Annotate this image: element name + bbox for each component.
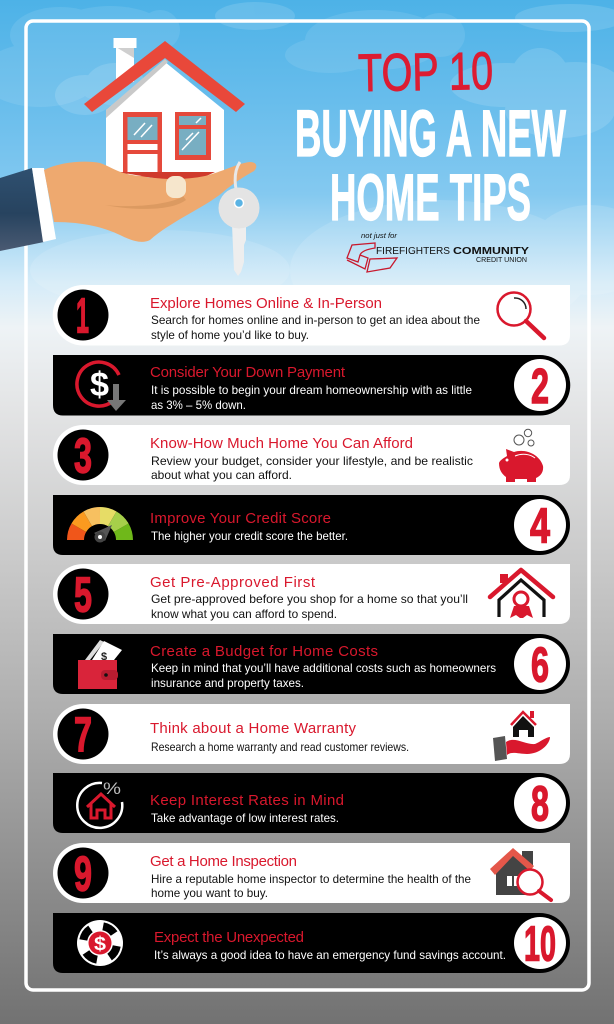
heading: Know-How Much Home You Can Afford [150, 435, 413, 452]
thumbnail [166, 176, 186, 198]
tip 6 panel [53, 634, 570, 694]
tip 3 panel [53, 425, 570, 485]
window [175, 112, 211, 160]
body: Get pre-approved before you shop for a home so that you’ll [151, 592, 468, 606]
tip 4 panel [53, 495, 570, 555]
thumb [105, 178, 186, 209]
number badge 2: 2 [531, 360, 549, 414]
body: Keep in mind that you’ll have additional costs such as homeowners [151, 661, 496, 675]
logo community: COMMUNITY [453, 245, 529, 257]
body [151, 454, 473, 482]
cuff [32, 168, 56, 242]
logo tagline: not just for [361, 231, 398, 240]
icon: credit gauge [76, 516, 124, 542]
heading: Improve Your Credit Score [150, 510, 331, 527]
number badge 10 [514, 917, 566, 972]
icon: percent house [77, 779, 122, 828]
number badge 10: 10 [524, 918, 556, 972]
body: know what you can afford to spend. [151, 607, 337, 621]
tip 7 panel [53, 704, 570, 764]
number badge 3: 3 [74, 430, 92, 484]
body: style of home you’d like to buy. [151, 328, 309, 342]
number badge 9 [58, 848, 108, 902]
number badge 5 [58, 568, 108, 622]
door [123, 112, 162, 177]
icon: magnifying glass [498, 292, 544, 338]
clouds [0, 2, 614, 340]
number badge 8 [514, 777, 566, 832]
number badge 4: 4 [530, 500, 550, 554]
title: top 10: TOP 10 [358, 42, 494, 103]
tip 5 panel [53, 564, 570, 624]
heading: Consider Your Down Payment [150, 364, 346, 381]
tip 10 panel [53, 913, 570, 973]
icon: dollar down arrow [77, 362, 126, 411]
icon: percent house: % [103, 779, 121, 798]
icon: hand holding house [493, 711, 550, 761]
number badge 2 [514, 359, 566, 414]
body: Search for homes online and in-person to get an idea about the [151, 313, 480, 327]
body [151, 383, 472, 412]
icon: wallet: $ [101, 651, 107, 663]
body: as 3% – 5% down. [151, 398, 246, 412]
hand [44, 162, 256, 242]
illustration: hand holding house and key [0, 38, 260, 276]
tip 1 panel [53, 285, 570, 346]
number badge 8: 8 [531, 778, 549, 832]
heading: Think about a Home Warranty [150, 720, 356, 737]
body: It is possible to begin your dream homeownership with as little [151, 383, 472, 397]
logo credit union: CREDIT UNION [476, 257, 527, 264]
icon: house inspection [490, 848, 551, 900]
heading: Get a Home Inspection [150, 853, 297, 870]
chimney [114, 38, 136, 82]
number badge 9: 9 [74, 848, 92, 902]
number badge 1 [58, 290, 108, 344]
number badge 5: 5 [74, 568, 92, 622]
logo [347, 231, 529, 272]
shadow under house [118, 172, 215, 184]
tip 2 panel [53, 355, 570, 416]
body: about what you can afford. [151, 468, 292, 482]
number badge 6: 6 [531, 638, 549, 692]
number badge 1: 1 [76, 290, 89, 344]
icon: house with ribbon [490, 570, 553, 618]
body [151, 313, 480, 342]
logo mark [347, 243, 397, 272]
heading: Keep Interest Rates in Mind [150, 792, 344, 809]
body: Research a home warranty and read customer reviews. [151, 740, 409, 754]
body: home you want to buy. [151, 886, 268, 900]
heading: Explore Homes Online & In-Person [150, 295, 382, 312]
number badge 3 [58, 430, 108, 484]
body [151, 872, 471, 900]
body [151, 661, 496, 690]
number badge 7: 7 [74, 708, 92, 762]
icon: wallet [78, 640, 122, 689]
number badge 7 [58, 708, 108, 762]
icon: lifebuoy [77, 920, 123, 966]
body: Take advantage of low interest rates. [151, 811, 339, 825]
body: Hire a reputable home inspector to determine the health of the [151, 872, 471, 886]
sleeve [0, 168, 44, 251]
roof [84, 41, 245, 112]
heading: Expect the Unexpected [154, 929, 304, 946]
roof shadow [106, 59, 168, 118]
number badge 6 [514, 638, 566, 692]
icon: lifebuoy: $ [94, 934, 106, 955]
body: Review your budget, consider your lifestyle, and be realistic [151, 454, 473, 468]
heading: Get Pre-Approved First [150, 574, 316, 591]
tip 8 panel [53, 773, 570, 833]
house walls [106, 62, 224, 176]
tip 9 panel [53, 843, 570, 903]
icon: dollar down arrow: $ [90, 366, 109, 404]
body: It’s always a good idea to have an emergency fund savings account. [154, 948, 506, 962]
icon: piggy bank [499, 429, 543, 482]
body [151, 592, 468, 621]
logo name: FIREFIGHTERS [376, 245, 450, 257]
body: The higher your credit score the better. [151, 529, 348, 543]
body: insurance and property taxes. [151, 676, 304, 690]
key [218, 162, 260, 276]
number badge 4 [514, 499, 566, 554]
heading: Create a Budget for Home Costs [150, 643, 378, 660]
